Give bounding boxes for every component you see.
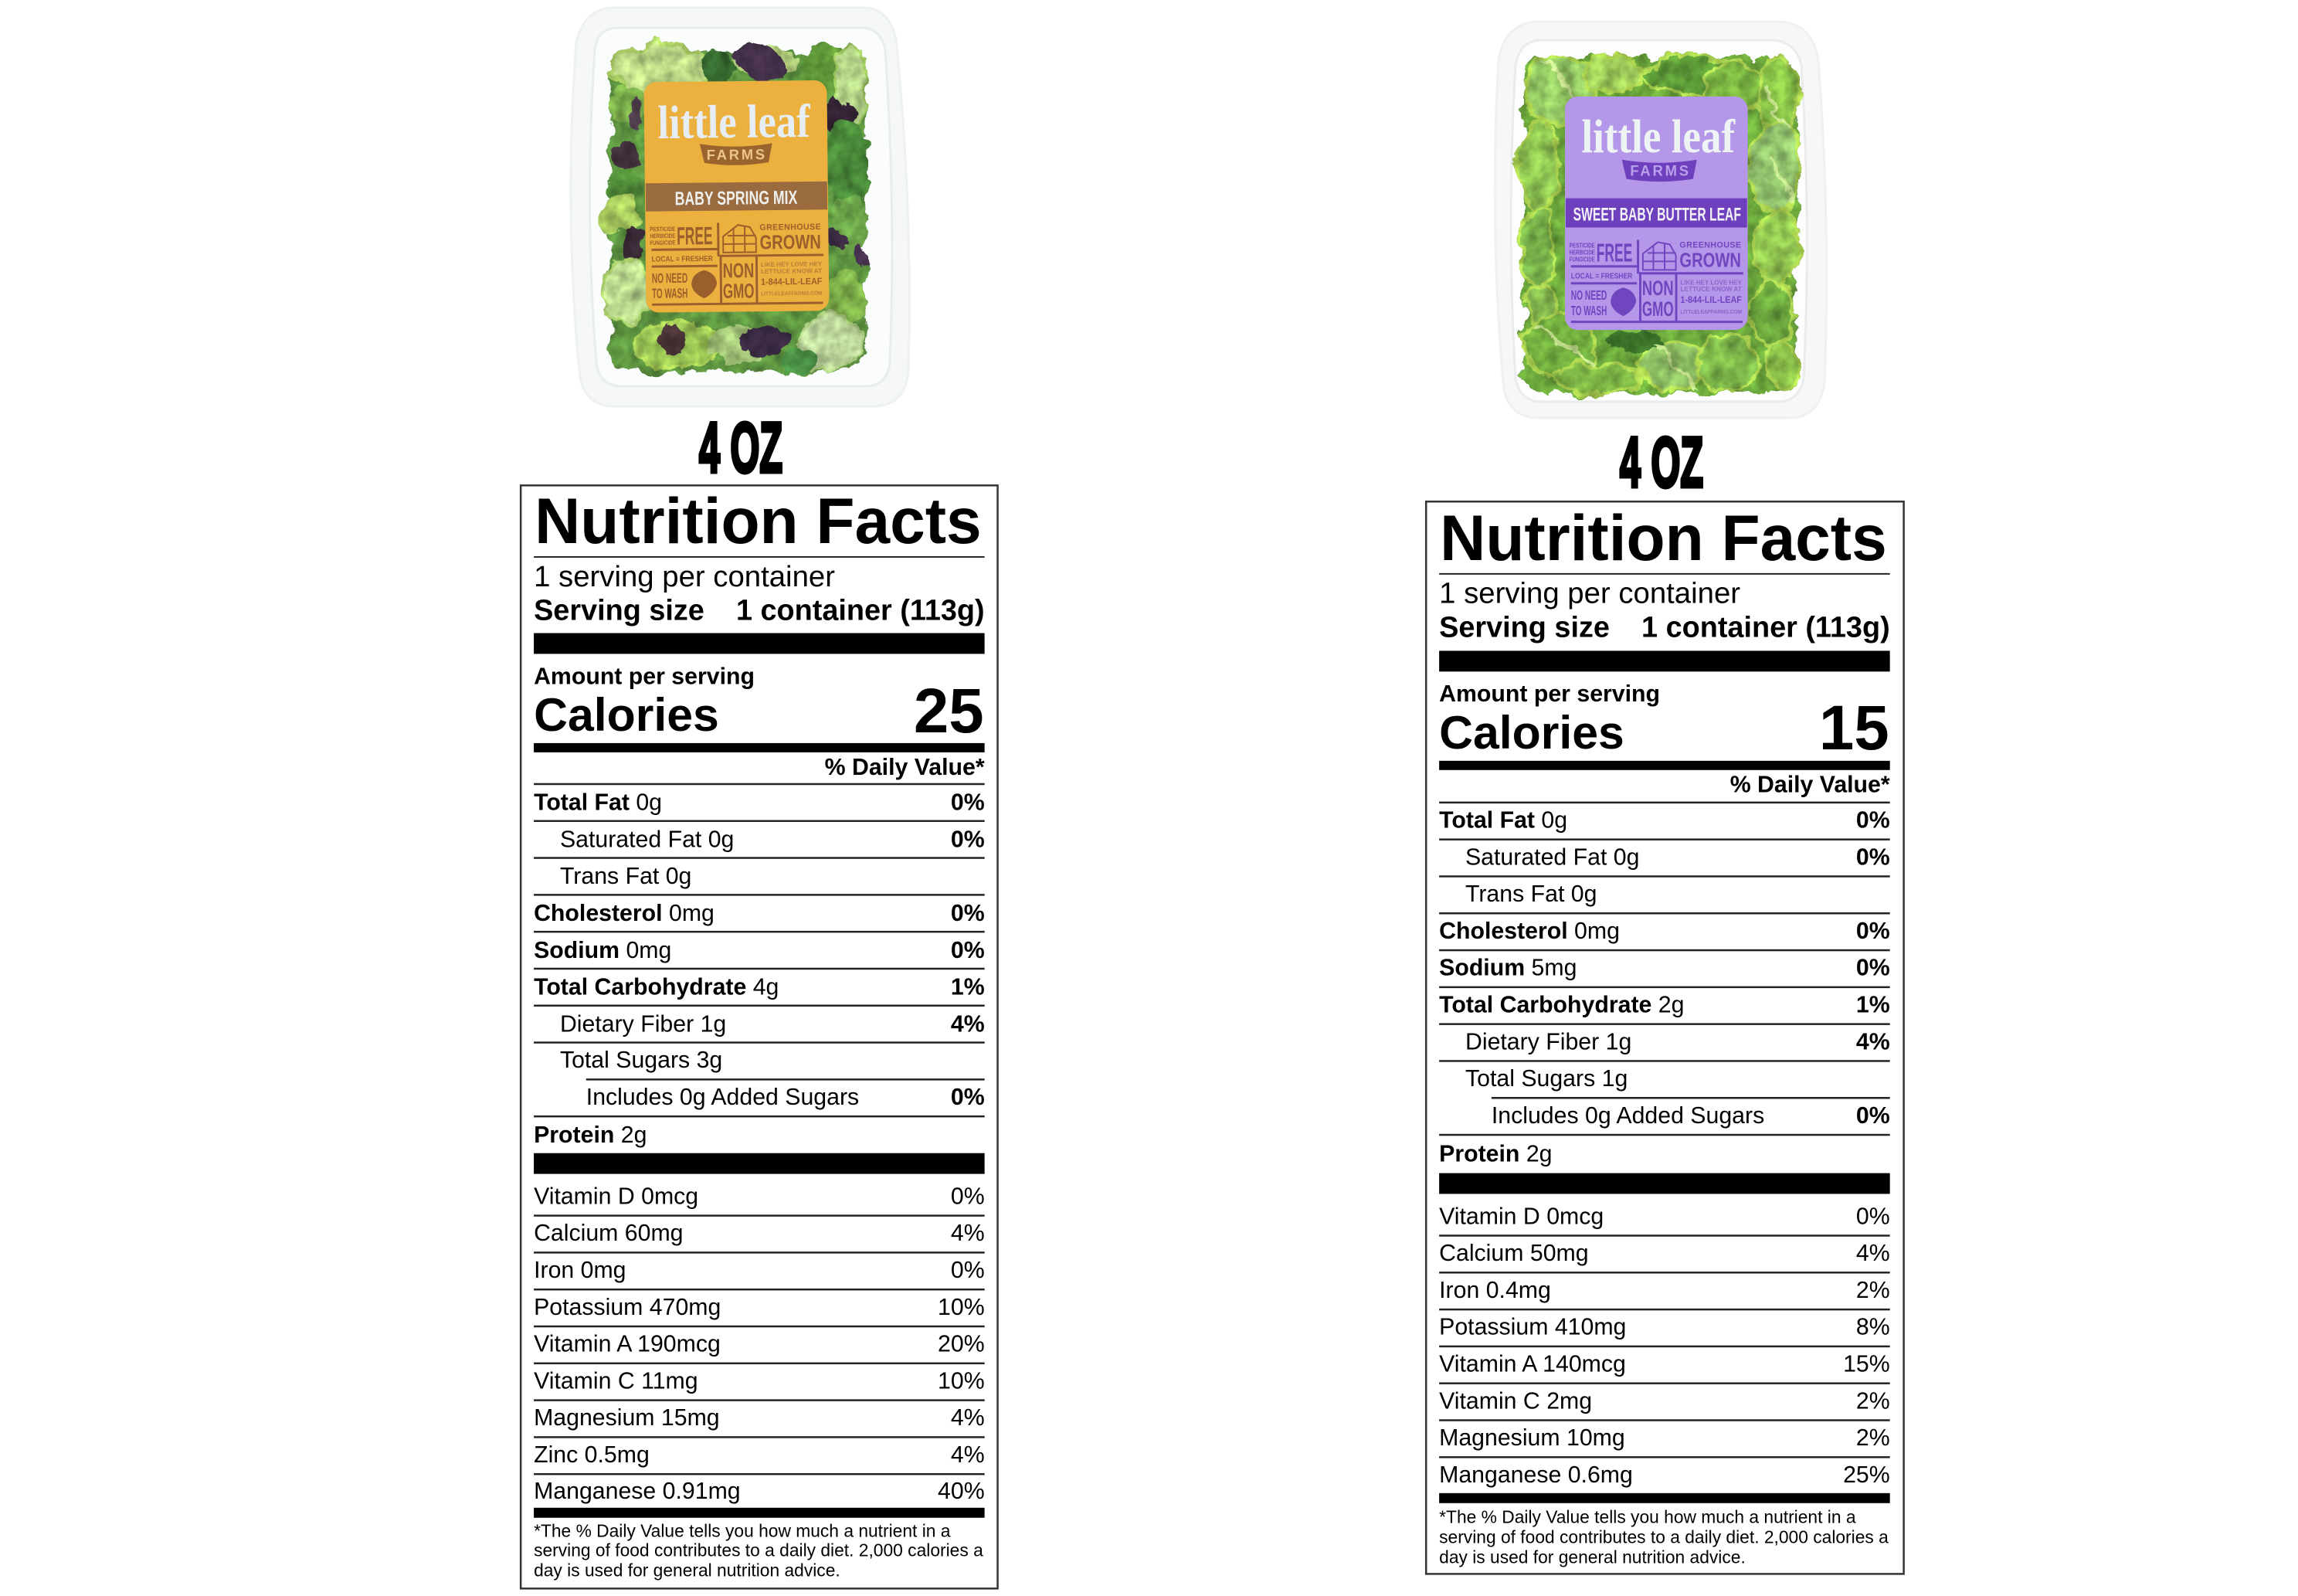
row: manganese: Manganese 0.6mg bbox=[1439, 1462, 1633, 1488]
row: vitamin c bbox=[534, 1368, 985, 1394]
row: magnesium: Magnesium 10mg bbox=[1439, 1425, 1625, 1451]
label claims panel: FREE bbox=[677, 222, 713, 250]
calories: Calories bbox=[1439, 706, 1624, 759]
row: calcium: 4% bbox=[1856, 1241, 1890, 1266]
label claims panel: NO NEED bbox=[652, 270, 687, 286]
row: saturated fat: 0% bbox=[951, 827, 985, 852]
label claims panel: HERBICIDE bbox=[650, 233, 675, 239]
yellow product label bbox=[643, 80, 829, 313]
row: total carbohydrate: Total Carbohydrate 2g bbox=[1439, 992, 1684, 1017]
daily value header: % Daily Value* bbox=[825, 755, 985, 780]
row: iron bbox=[534, 1258, 985, 1283]
row: cholesterol: 0% bbox=[951, 901, 985, 926]
row: calcium bbox=[1439, 1241, 1890, 1266]
label claims panel: GROWN bbox=[1679, 250, 1741, 271]
label claims panel: LETTUCE KNOW AT bbox=[761, 267, 823, 275]
label claims panel: LIKE HEY LOVE HEY bbox=[761, 260, 823, 268]
row: vitamin d bbox=[1439, 1204, 1890, 1229]
row: added sugars bbox=[1492, 1103, 1890, 1129]
label claims panel: LITTLELEAFFARMS.COM bbox=[1680, 310, 1742, 315]
label claims panel: PESTICIDE bbox=[1570, 242, 1595, 249]
row: total sugars: Total Sugars 3g bbox=[560, 1048, 722, 1073]
row: dietary fiber: 4% bbox=[1856, 1029, 1890, 1054]
purple product label bbox=[1565, 97, 1748, 330]
label claims panel: FUNGICIDE bbox=[1570, 256, 1595, 263]
row: sodium: Sodium 0mg bbox=[534, 938, 671, 963]
servings per container: 1 serving per container bbox=[534, 560, 835, 593]
row: potassium: Potassium 470mg bbox=[534, 1295, 721, 1320]
footnote: *The % Daily Value tells you how much a nutrient in a bbox=[1439, 1507, 1856, 1527]
serving size: Serving size bbox=[1439, 612, 1610, 644]
net weight: left product: 4 OZ bbox=[699, 409, 782, 487]
row: zinc bbox=[534, 1442, 985, 1468]
row: vitamin a: 20% bbox=[938, 1332, 985, 1357]
row: vitamin d: Vitamin D 0mcg bbox=[1439, 1204, 1604, 1229]
row: dietary fiber bbox=[560, 1011, 985, 1037]
row: vitamin a: Vitamin A 190mcg bbox=[534, 1332, 721, 1357]
footnote: day is used for general nutrition advice. bbox=[534, 1560, 840, 1580]
row: zinc: 4% bbox=[951, 1442, 985, 1468]
butter leaf lettuce bbox=[1519, 55, 1799, 394]
label claims panel: FREE bbox=[1597, 239, 1632, 267]
label claims panel bbox=[1570, 239, 1743, 323]
row: iron: Iron 0.4mg bbox=[1439, 1278, 1551, 1303]
row: saturated fat bbox=[560, 827, 985, 852]
label claims panel: NON bbox=[722, 259, 754, 282]
product name band: BABY SPRING MIX bbox=[675, 188, 798, 209]
nutrition facts panel: baby spring mix bbox=[521, 484, 998, 1588]
row: vitamin c: 10% bbox=[938, 1368, 985, 1394]
farms banner: FARMS bbox=[707, 146, 765, 163]
row: sodium: 0% bbox=[1856, 956, 1890, 981]
label claims panel: GREENHOUSE bbox=[759, 222, 821, 233]
net weight: right product: 4 OZ bbox=[1620, 423, 1703, 502]
row: vitamin a bbox=[1439, 1352, 1890, 1377]
row: vitamin d: 0% bbox=[1856, 1204, 1890, 1229]
calories: 25 bbox=[914, 676, 984, 746]
serving size bbox=[534, 595, 985, 627]
label claims panel: LOCAL = FRESHER bbox=[1571, 272, 1632, 280]
row: magnesium: 2% bbox=[1856, 1425, 1890, 1451]
label claims panel: LETTUCE KNOW AT bbox=[1680, 286, 1742, 293]
label claims panel: PESTICIDE bbox=[650, 226, 675, 233]
label claims panel: FUNGICIDE bbox=[650, 239, 675, 246]
row: protein: Protein 2g bbox=[1439, 1142, 1552, 1167]
label claims panel: LIKE HEY LOVE HEY bbox=[1680, 279, 1743, 286]
product name band bbox=[646, 182, 827, 212]
calories bbox=[534, 676, 984, 746]
calories: Calories bbox=[534, 688, 719, 741]
footnote: serving of food contributes to a daily diet. 2,000 calories a bbox=[534, 1540, 983, 1560]
farms banner: FARMS bbox=[1630, 162, 1689, 179]
footnote: serving of food contributes to a daily diet. 2,000 calories a bbox=[1439, 1527, 1889, 1547]
row: sodium bbox=[534, 938, 985, 963]
row: total fat bbox=[534, 790, 985, 816]
row: vitamin a bbox=[534, 1332, 985, 1357]
clear plastic tray bbox=[571, 8, 909, 406]
row: total carbohydrate: Total Carbohydrate 4g bbox=[534, 975, 779, 1000]
row: sodium bbox=[1439, 956, 1890, 981]
label claims panel: 1-844-LIL-LEAF bbox=[1680, 294, 1742, 305]
amount per serving: Amount per serving bbox=[534, 664, 755, 689]
row: magnesium bbox=[1439, 1425, 1890, 1451]
row: cholesterol bbox=[534, 901, 985, 926]
row: saturated fat bbox=[1465, 844, 1890, 870]
row: total fat: Total Fat 0g bbox=[1439, 807, 1567, 833]
farms banner bbox=[700, 143, 772, 165]
product name band bbox=[1566, 199, 1747, 227]
row: manganese: 25% bbox=[1843, 1462, 1890, 1488]
row: vitamin a: Vitamin A 140mcg bbox=[1439, 1352, 1626, 1377]
footnote bbox=[1439, 1507, 1889, 1567]
label claims panel: LITTLELEAFFARMS.COM bbox=[761, 291, 823, 297]
row: magnesium: Magnesium 15mg bbox=[534, 1405, 720, 1431]
row: magnesium bbox=[534, 1405, 985, 1431]
brand name: little leaf bbox=[1581, 110, 1736, 163]
row: dietary fiber: 4% bbox=[951, 1011, 985, 1037]
row: vitamin c: Vitamin C 11mg bbox=[534, 1368, 698, 1394]
product photo: sweet baby butter leaf package bbox=[1495, 22, 1827, 418]
label claims panel: GMO bbox=[723, 279, 755, 303]
calories: 15 bbox=[1819, 693, 1889, 763]
row: potassium bbox=[534, 1295, 985, 1320]
row: potassium bbox=[1439, 1315, 1890, 1340]
row: calcium bbox=[534, 1221, 985, 1246]
label claims panel bbox=[650, 220, 824, 306]
label claims panel: GREENHOUSE bbox=[1679, 240, 1741, 250]
serving size: 1 container (113g) bbox=[736, 595, 985, 627]
row: total carbohydrate: 1% bbox=[1856, 992, 1890, 1017]
clear plastic tray bbox=[1495, 22, 1827, 418]
row: vitamin d bbox=[534, 1183, 985, 1209]
nutrition facts panel: sweet baby butter leaf bbox=[1426, 501, 1904, 1574]
row: total carbohydrate: 1% bbox=[951, 975, 985, 1000]
serving size bbox=[1439, 612, 1890, 644]
row: dietary fiber bbox=[1465, 1029, 1890, 1054]
row: saturated fat: Saturated Fat 0g bbox=[560, 827, 734, 852]
label claims panel: GMO bbox=[1642, 297, 1674, 321]
row: cholesterol: Cholesterol 0mg bbox=[1439, 919, 1620, 944]
row: total fat: Total Fat 0g bbox=[534, 790, 662, 816]
row: vitamin d: 0% bbox=[951, 1183, 985, 1209]
row: total sugars: Total Sugars 1g bbox=[1465, 1066, 1628, 1092]
row: protein: Protein 2g bbox=[534, 1122, 647, 1148]
row: added sugars: Includes 0g Added Sugars bbox=[1492, 1103, 1764, 1129]
product name band: SWEET BABY BUTTER LEAF bbox=[1573, 205, 1741, 226]
amount per serving: Amount per serving bbox=[1439, 681, 1660, 707]
row: vitamin c: Vitamin C 2mg bbox=[1439, 1388, 1592, 1414]
row: zinc: Zinc 0.5mg bbox=[534, 1442, 650, 1468]
row: added sugars: 0% bbox=[1856, 1103, 1890, 1129]
farms banner bbox=[1622, 160, 1697, 182]
product photo: baby spring mix package bbox=[571, 8, 909, 406]
row: added sugars bbox=[586, 1085, 985, 1110]
row: cholesterol bbox=[1439, 919, 1890, 944]
label claims panel: TO WASH bbox=[1571, 303, 1607, 318]
row: potassium: Potassium 410mg bbox=[1439, 1315, 1626, 1340]
row: iron: Iron 0mg bbox=[534, 1258, 626, 1283]
label claims panel: 1-844-LIL-LEAF bbox=[761, 277, 822, 287]
serving size: 1 container (113g) bbox=[1641, 612, 1890, 644]
footnote: day is used for general nutrition advice. bbox=[1439, 1547, 1746, 1567]
row: vitamin c: 2% bbox=[1856, 1388, 1890, 1414]
row: added sugars: Includes 0g Added Sugars bbox=[586, 1085, 859, 1110]
row: iron: 2% bbox=[1856, 1278, 1890, 1303]
row: trans fat: Trans Fat 0g bbox=[1465, 881, 1597, 907]
row: vitamin c bbox=[1439, 1388, 1890, 1414]
footnote bbox=[534, 1521, 983, 1580]
row: total fat: 0% bbox=[1856, 807, 1890, 833]
heading: Nutrition Facts bbox=[1440, 501, 1887, 574]
calories bbox=[1439, 693, 1889, 763]
row: added sugars: 0% bbox=[951, 1085, 985, 1110]
label claims panel: TO WASH bbox=[652, 285, 688, 301]
row: dietary fiber: Dietary Fiber 1g bbox=[560, 1011, 726, 1037]
label claims panel: LOCAL = FRESHER bbox=[652, 255, 713, 264]
label claims panel: NO NEED bbox=[1571, 287, 1607, 303]
label claims panel: NON bbox=[1642, 277, 1674, 300]
servings per container: 1 serving per container bbox=[1439, 577, 1740, 610]
heading: Nutrition Facts bbox=[535, 484, 982, 557]
brand name: little leaf bbox=[657, 95, 811, 149]
footnote: *The % Daily Value tells you how much a nutrient in a bbox=[534, 1521, 951, 1541]
label claims panel: HERBICIDE bbox=[1570, 249, 1595, 256]
row: saturated fat: 0% bbox=[1856, 844, 1890, 870]
row: manganese: 40% bbox=[938, 1479, 985, 1504]
row: sodium: Sodium 5mg bbox=[1439, 956, 1577, 981]
row: saturated fat: Saturated Fat 0g bbox=[1465, 844, 1639, 870]
row: total fat bbox=[1439, 807, 1890, 833]
row: trans fat: Trans Fat 0g bbox=[560, 864, 691, 889]
row: calcium: 4% bbox=[951, 1221, 985, 1246]
row: iron bbox=[1439, 1278, 1890, 1303]
row: iron: 0% bbox=[951, 1258, 985, 1283]
row: total fat: 0% bbox=[951, 790, 985, 816]
mixed salad leaves bbox=[599, 36, 870, 372]
row: calcium: Calcium 60mg bbox=[534, 1221, 684, 1246]
row: potassium: 10% bbox=[938, 1295, 985, 1320]
row: calcium: Calcium 50mg bbox=[1439, 1241, 1589, 1266]
row: manganese: Manganese 0.91mg bbox=[534, 1479, 741, 1504]
row: manganese bbox=[1439, 1462, 1890, 1488]
label claims panel: GROWN bbox=[759, 231, 821, 253]
row: cholesterol: Cholesterol 0mg bbox=[534, 901, 715, 926]
row: total carbohydrate bbox=[534, 975, 985, 1000]
row: vitamin d: Vitamin D 0mcg bbox=[534, 1183, 698, 1209]
row: potassium: 8% bbox=[1856, 1315, 1890, 1340]
daily value header: % Daily Value* bbox=[1730, 773, 1890, 798]
row: dietary fiber: Dietary Fiber 1g bbox=[1465, 1029, 1631, 1054]
row: magnesium: 4% bbox=[951, 1405, 985, 1431]
row: total carbohydrate bbox=[1439, 992, 1890, 1017]
row: cholesterol: 0% bbox=[1856, 919, 1890, 944]
serving size: Serving size bbox=[534, 595, 704, 627]
row: sodium: 0% bbox=[951, 938, 985, 963]
row: manganese bbox=[534, 1479, 985, 1504]
row: vitamin a: 15% bbox=[1843, 1352, 1890, 1377]
